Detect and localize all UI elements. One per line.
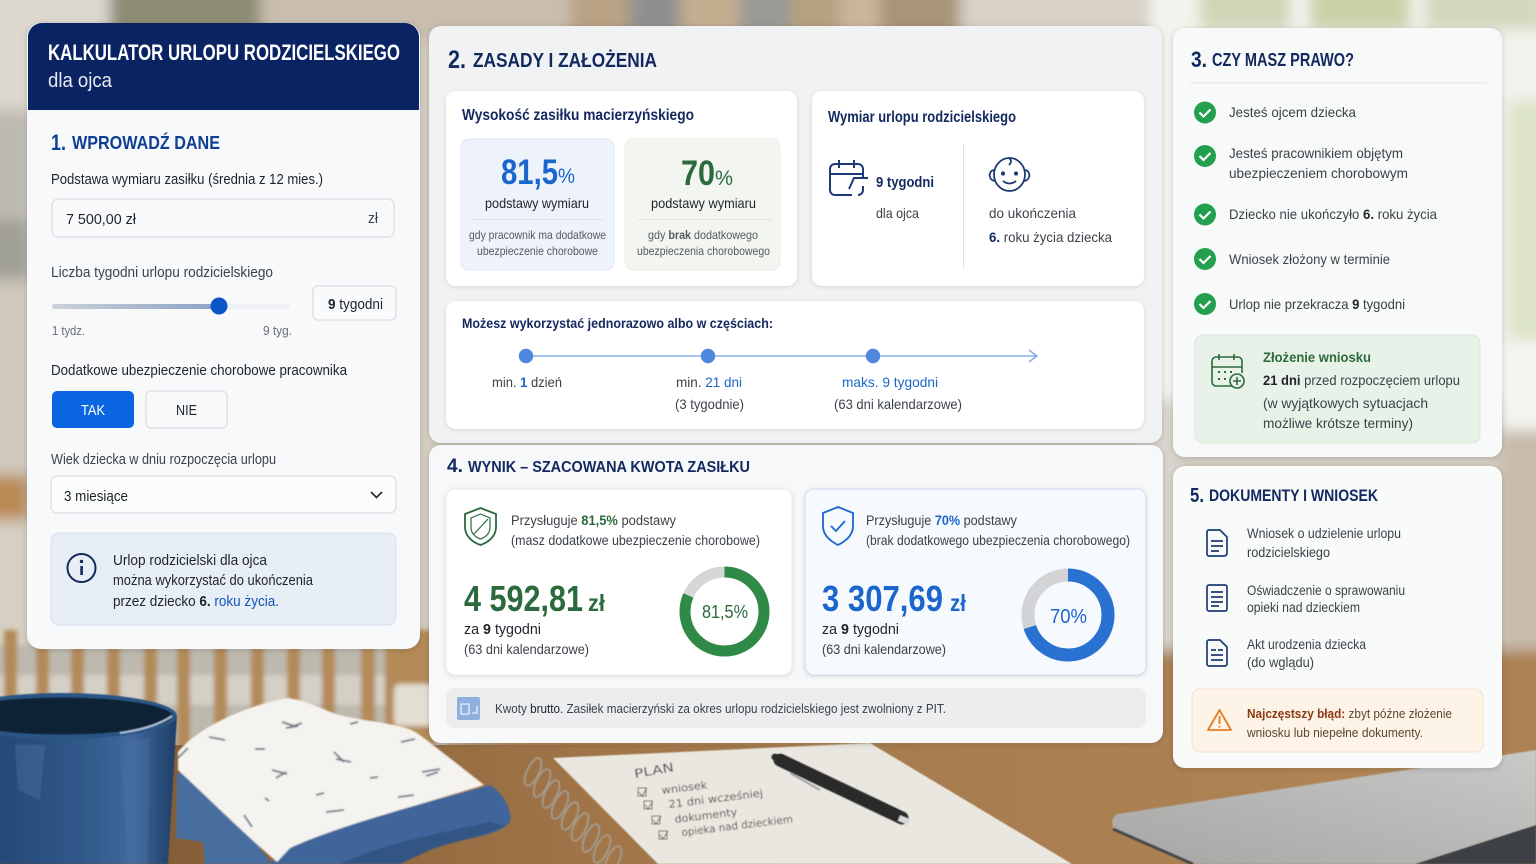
- callout: info about child age: przez dziecko 6. roku życia.: [113, 594, 279, 610]
- heading: step 2: ZASADY I ZAŁOŻENIA: [473, 49, 657, 72]
- field: additional insurance toggle: [51, 363, 348, 428]
- field: child age select: Wiek dziecka w dniu rozpoczęcia urlopu: [51, 452, 276, 468]
- document: application: [1207, 526, 1401, 560]
- checklist: ubezpieczeniem chorobowym: [1229, 165, 1408, 181]
- box: 81,5% rate: ubezpieczenie chorobowe: [477, 244, 598, 258]
- icon: blue shield: [823, 507, 853, 545]
- header: calculator title: KALKULATOR URLOPU RODZICIELSKIEGO: [48, 40, 400, 65]
- field: additional insurance toggle: NIE: [176, 403, 197, 419]
- field: weeks slider: 9 tygodni: [328, 297, 383, 313]
- document: care declaration: Oświadczenie o sprawowaniu: [1247, 583, 1405, 598]
- document: birth certificate: Akt urodzenia dziecka: [1247, 637, 1366, 652]
- card: result 81,5%: za 9 tygodni: [464, 622, 541, 638]
- photo: spiral notebook with handwritten plan: 21 dni wcześniej: [668, 787, 764, 811]
- card: result 81,5%: 4 592,81: [464, 578, 583, 619]
- callout: info about child age: [51, 533, 396, 625]
- panel: eligibility: [1173, 28, 1502, 457]
- card: leave duration: [812, 91, 1144, 286]
- checklist: Jesteś ojcem dziecka: [1229, 104, 1356, 120]
- photo: blue mug: [0, 693, 177, 864]
- heading: step 1: 1.: [51, 130, 66, 155]
- heading: step 1: WPROWADŹ DANE: [72, 132, 220, 153]
- icon: green calendar: [1212, 354, 1244, 388]
- card: leave duration: do ukończenia: [989, 205, 1076, 221]
- heading: step 2: [448, 46, 657, 74]
- icon: warning triangle: [1208, 710, 1231, 730]
- field: benefit base: 7 500,00 zł: [66, 212, 137, 228]
- card: leave duration: dla ojca: [876, 205, 919, 221]
- box: 81,5% rate: gdy pracownik ma dodatkowe: [469, 228, 606, 242]
- photo: spiral notebook with handwritten plan: opieka nad dzieckiem: [681, 813, 794, 839]
- card: leave duration: Wymiar urlopu rodzicielskiego: [828, 109, 1016, 126]
- donut chart: 81,5%: [685, 572, 764, 651]
- field: benefit base: [51, 172, 394, 237]
- card: timeline of parts: Możesz wykorzystać jednorazowo albo w częściach:: [462, 315, 773, 331]
- card: result 81,5%: zł: [588, 590, 606, 616]
- box: 70% rate: %: [715, 167, 733, 190]
- field: weeks slider: 9 tyg.: [263, 323, 292, 338]
- background: blurred crib slats: [0, 630, 450, 755]
- card: result 70%: Przysługuje 70% podstawy: [866, 513, 1017, 528]
- card: timeline of parts: [446, 301, 1144, 429]
- heading: step 2: 2.: [448, 46, 466, 74]
- box: 70% rate: ubezpieczenia chorobowego: [637, 244, 770, 258]
- callout: info about child age: Urlop rodzicielski dla ojca: [113, 553, 268, 569]
- callout: info about child age: można wykorzystać do ukończenia: [113, 573, 314, 589]
- field: weeks slider: [51, 265, 396, 338]
- card: result 70%: za 9 tygodni: [822, 622, 899, 638]
- box: 81,5% rate: 81,5: [501, 153, 558, 192]
- box: 70% rate: podstawy wymiaru: [651, 195, 756, 211]
- document: application: rodzicielskiego: [1247, 545, 1330, 560]
- document: care declaration: opieki nad dzieckiem: [1247, 600, 1360, 615]
- photo: laptop: [1112, 750, 1536, 864]
- box: 81,5% rate: [461, 139, 614, 270]
- card: result 81,5%: (63 dni kalendarzowe): [464, 641, 589, 657]
- checklist: [1194, 102, 1437, 315]
- photo: folded baby blanket: [176, 698, 510, 864]
- card: timeline of parts: (3 tygodnie): [675, 396, 744, 412]
- card: result 81,5%: Przysługuje 81,5% podstawy: [511, 513, 676, 528]
- card: benefit level: [446, 91, 797, 286]
- card: timeline of parts: maks. 9 tygodni: [842, 374, 938, 390]
- checklist: Jesteś pracownikiem objętym: [1229, 145, 1403, 161]
- checklist: Urlop nie przekracza 9 tygodni: [1229, 296, 1405, 312]
- panel: calculator input: [27, 23, 420, 649]
- callout: most common mistake: wniosku lub niepełne dokumenty.: [1246, 725, 1423, 740]
- heading: step 4: WYNIK – SZACOWANA KWOTA ZASIŁKU: [468, 459, 750, 476]
- card: result 70%: 3 307,69: [822, 578, 943, 619]
- heading: step 3: 3.: [1191, 47, 1207, 72]
- card: result 70%: (63 dni kalendarzowe): [822, 641, 946, 657]
- card: result 70%: (brak dodatkowego ubezpieczenia chorobowego): [866, 533, 1130, 548]
- photo: black pen: [775, 757, 909, 822]
- heading: step 1: [51, 130, 220, 155]
- note: gross amounts: Kwoty brutto. Zasiłek macierzyński za okres urlopu rodzicielskiego jest zwolniony z PIT.: [495, 701, 946, 716]
- heading: step 3: [1191, 47, 1354, 72]
- donut chart: 70%: 70%: [1050, 606, 1087, 628]
- panel: result: [429, 445, 1163, 743]
- field: additional insurance toggle: TAK: [81, 403, 105, 419]
- heading: step 4: [447, 456, 750, 477]
- icon: baby face: [990, 158, 1029, 191]
- box: 70% rate: 70: [681, 154, 715, 193]
- heading: step 3: CZY MASZ PRAWO?: [1212, 50, 1354, 70]
- field: additional insurance toggle: Dodatkowe ubezpieczenie chorobowe pracownika: [51, 363, 348, 379]
- field: child age select: [51, 452, 396, 513]
- document: birth certificate: (do wglądu): [1247, 655, 1314, 670]
- callout: application deadline: 21 dni przed rozpoczęciem urlopu: [1263, 372, 1460, 388]
- card: benefit level: Wysokość zasiłku macierzyńskiego: [462, 107, 694, 124]
- note: gross amounts: [446, 688, 1146, 728]
- heading: step 5: 5.: [1190, 485, 1204, 507]
- icon: calendar: [830, 160, 868, 195]
- header: calculator title: [28, 23, 419, 110]
- box: 81,5% rate: podstawy wymiaru: [485, 195, 589, 211]
- field: benefit base: Podstawa wymiaru zasiłku (średnia z 12 mies.): [51, 172, 323, 188]
- document: application: Wniosek o udzielenie urlopu: [1247, 526, 1401, 541]
- box: 70% rate: gdy brak dodatkowego: [648, 228, 758, 242]
- document: care declaration: [1207, 583, 1405, 615]
- heading: step 4: 4.: [447, 456, 463, 477]
- callout: most common mistake: Najczęstszy błąd: zbyt późne złożenie: [1247, 706, 1452, 721]
- photo: spiral notebook with handwritten plan: wniosek: [661, 779, 709, 797]
- card: leave duration: 9 tygodni: [876, 175, 934, 191]
- card: leave duration: 6. roku życia dziecka: [989, 229, 1112, 245]
- field: child age select: 3 miesiące: [64, 489, 128, 505]
- box: 81,5% rate: %: [558, 165, 575, 188]
- card: result 70%: zł: [950, 590, 967, 616]
- header: calculator title: dla ojca: [48, 70, 113, 92]
- icon: green shield: [465, 508, 496, 545]
- card: timeline of parts: min. 1 dzień: [492, 374, 562, 390]
- document: birth certificate: [1207, 637, 1366, 670]
- photo: spiral notebook with handwritten plan: [521, 743, 1072, 864]
- field: weeks slider: 1 tydz.: [52, 323, 85, 338]
- panel: documents: [1173, 466, 1502, 768]
- wooden table: [0, 745, 1536, 864]
- donut chart: 81,5%: 81,5%: [702, 602, 748, 622]
- donut chart: 70%: [1028, 575, 1108, 655]
- card: timeline of parts: min. 21 dni: [676, 374, 742, 390]
- callout: most common mistake: [1192, 689, 1483, 752]
- panel: rules and assumptions: [429, 26, 1162, 443]
- heading: step 5: [1190, 485, 1379, 507]
- callout: application deadline: (w wyjątkowych sytuacjach: [1263, 395, 1428, 411]
- card: result 81,5%: (masz dodatkowe ubezpieczenie chorobowe): [511, 533, 760, 548]
- callout: application deadline: możliwe krótsze terminy): [1263, 415, 1413, 431]
- photo: spiral notebook with handwritten plan: dokumenty: [674, 806, 738, 826]
- photo: spiral notebook with handwritten plan: PLAN: [633, 760, 675, 781]
- field: benefit base: zł: [368, 211, 379, 227]
- callout: application deadline: Złożenie wniosku: [1263, 349, 1371, 365]
- card: timeline of parts: (63 dni kalendarzowe): [834, 396, 962, 412]
- checklist: Wniosek złożony w terminie: [1229, 251, 1390, 267]
- callout: application deadline: [1195, 335, 1480, 443]
- field: weeks slider: Liczba tygodni urlopu rodzicielskiego: [51, 265, 273, 281]
- card: result 70%: [805, 489, 1146, 675]
- timeline arrow: [519, 349, 1037, 363]
- checklist: Dziecko nie ukończyło 6. roku życia: [1229, 206, 1437, 222]
- heading: step 5: DOKUMENTY I WNIOSEK: [1209, 486, 1379, 505]
- card: result 81,5%: [446, 489, 792, 675]
- box: 70% rate: [625, 139, 780, 270]
